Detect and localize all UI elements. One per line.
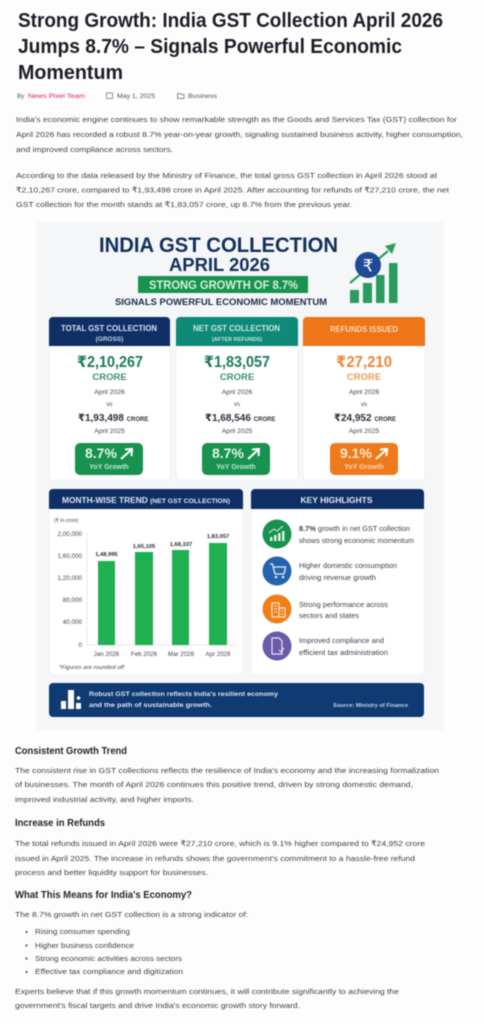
paragraph: growth trend [15,766,439,804]
panel: key highlights [251,489,424,675]
panel: key highlights: KEY HIGHLIGHTS [300,495,373,505]
paragraph: refunds: issued in April 2025. The increase in refunds shows the government's commitment to a hassle-free refund [15,854,415,863]
panel: net GST collection: ₹1,68,546 CRORE [205,413,275,424]
panel: total GST collection: ₹2,10,267 [77,354,143,371]
highlight: consumption: driving revenue growth [299,575,376,582]
panel: total GST collection: TOTAL GST COLLECTION [61,324,157,333]
article meta row: May 1, 2025 [117,93,156,100]
panel: net GST collection [176,317,298,480]
panel: total GST collection: vs [106,402,112,408]
footer banner: Robust GST collection reflects India's resilient economy [89,691,278,698]
icon: rupee growth chart: ₹ [363,256,373,276]
panel: total GST collection: ₹1,93,498 CRORE [78,413,148,424]
paragraph: refunds: process and better liquidity support for businesses. [15,868,208,877]
infographic heading: STRONG GROWTH OF 8.7% [149,278,298,292]
highlight: compliance: efficient tax administration [299,650,388,657]
intro paragraph 1: India's economic engine continues to show remarkable strength as the Goods and Services Tax (GST) collection for [16,115,457,124]
bar chart: 1,83,057 [207,534,229,540]
icon: rupee growth chart [350,243,398,303]
heading: increase in refunds: Increase in Refunds [15,818,105,829]
bullet list: Strong economic activities across sectors [35,954,182,963]
infographic heading: SIGNALS POWERFUL ECONOMIC MOMENTUM [115,297,327,307]
bar chart: 1,48,995 [95,552,119,558]
panel: refunds issued: YoY Growth [344,464,384,471]
panel: total GST collection: (GROSS) [96,336,123,343]
article meta row [17,93,217,100]
bar chart: 80,000 [63,597,82,604]
bullet list: Higher business confidence [35,941,134,950]
panel: net GST collection: April 2026 [222,389,253,396]
bar chart: (₹ in crore) [54,518,79,524]
highlight: sectors: Strong performance across [299,602,389,609]
highlight: sectors: sectors and states [299,613,360,620]
closing paragraph: government's fiscal targets and drive India's economic growth story forward. [15,1001,300,1010]
panel: total GST collection [49,317,170,480]
bar chart: Jan 2026 [94,651,120,658]
highlight: growth [262,520,414,548]
title: Strong Growth: India GST Collection April 2026 [18,9,443,32]
intro paragraph 1 [16,115,463,154]
footer banner [49,683,424,717]
panel: refunds issued: ₹24,952 CRORE [334,413,396,424]
panel: net GST collection: NET GST COLLECTION [193,324,280,333]
bullet list [26,927,183,976]
panel: total GST collection: 8.7% [85,445,117,461]
bar chart: 40,000 [63,619,82,626]
highlight: growth: shows strong economic momentum [299,538,414,545]
intro paragraph 2: ₹2,10,267 crore, compared to ₹1,93,498 crore in April 2025. After accounting for refunds of ₹27,210 crore, the net [16,186,450,194]
panel: net GST collection: April 2025 [222,428,253,435]
intro paragraph 1: and improved compliance across sectors. [16,145,173,154]
intro paragraph 2: According to the data released by the Ministry of Finance, the total gross GST collection in April 2026 stood at [16,171,438,180]
bar chart: 1,68,337 [170,542,192,548]
bar chart: 0 [78,642,82,649]
panel: net GST collection: ₹1,83,057 [204,354,270,371]
heading: consistent growth trend: Consistent Growth Trend [15,746,127,757]
bar chart: Feb 2026 [131,651,158,658]
panel: net GST collection: (AFTER REFUNDS) [212,337,262,343]
title [18,9,443,84]
infographic [36,222,444,730]
panel: refunds issued: vs [361,402,367,408]
panel: refunds issued: CRORE [347,372,381,383]
panel: refunds issued: ₹27,210 [336,354,392,371]
footer banner: and the path of sustainable growth. [89,702,212,709]
highlight: consumption [262,556,397,586]
panel: month-wise trend: MONTH-WISE TREND (NET GST COLLECTION) [62,496,230,505]
panel: refunds issued: April 2026 [349,389,380,396]
panel: month-wise trend [49,489,243,675]
intro paragraph 2: GST collection for the month stands at ₹1,83,057 crore, up 8.7% from the previous year. [16,200,352,209]
panel: net GST collection: YoY Growth [216,464,256,471]
paragraph: refunds: The total refunds issued in April 2026 were ₹27,210 crore, which is 9.1% higher compared to ₹24,952 crore [15,839,425,848]
intro paragraph 2 [16,171,450,209]
infographic heading: APRIL 2026 [169,255,270,275]
panel: refunds issued: 9.1% [340,445,372,461]
panel: total GST collection: CRORE [92,372,127,383]
panel: net GST collection: 8.7% [212,445,244,461]
infographic heading: INDIA GST COLLECTION [99,234,338,257]
bar chart: 1,60,000 [57,553,82,560]
infographic heading [99,234,338,307]
panel: month-wise trend: *Figures are rounded off [59,665,125,671]
title: Momentum [18,61,123,84]
article meta row: News Pixel Team [28,93,85,100]
panel: refunds issued: April 2025 [349,428,380,435]
paragraph: growth trend: of businesses. The month of April 2026 continues this positive trend, driven by strong domestic demand, [15,780,413,789]
article meta row: Business [188,93,217,100]
bar chart: 2,00,000 [57,531,82,538]
bar chart: 1,65,105 [133,544,156,550]
bar chart: 1,20,000 [57,575,82,582]
panel: net GST collection: vs [234,402,240,408]
icon: bars [61,690,81,709]
heading: what this means: What This Means for India's Economy? [15,890,192,901]
bullet list: Effective tax compliance and digitization [35,967,183,976]
panel: refunds issued: REFUNDS ISSUED [330,325,398,334]
footer banner: Source: Ministry of Finance [333,703,408,709]
closing paragraph [15,987,399,1010]
bar chart: Apr 2026 [205,651,231,658]
highlight: compliance: Improved compliance and [299,638,384,645]
bullet list: Rising consumer spending [35,927,130,936]
panel: total GST collection: YoY Growth [89,464,129,471]
highlight: sectors [262,594,389,624]
highlight: consumption: Higher domestic consumption [299,563,397,570]
highlight: growth: 8.7% growth in net GST collection [299,526,410,533]
panel: net GST collection: CRORE [220,372,254,383]
title: Jumps 8.7% – Signals Powerful Economic [18,35,402,58]
panel: refunds issued [303,317,425,480]
highlight: compliance [262,632,388,660]
bar chart: Mar 2026 [168,651,195,658]
lead-in sentence: The 8.7% growth in net GST collection is a strong indicator of: [15,910,248,919]
paragraph: refunds [15,839,425,877]
intro paragraph 1: April 2026 has recorded a robust 8.7% year-on-year growth, signaling sustained business activity, higher consumption, [16,130,463,139]
bar chart [54,518,238,658]
paragraph: growth trend: The consistent rise in GST collections reflects the resilience of India's economy and the increasing formalization [15,766,439,775]
article meta row: By [17,93,25,100]
panel: total GST collection: April 2026 [94,389,125,396]
closing paragraph: Experts believe that if this growth momentum continues, it will contribute significantly to achieving the [15,987,399,996]
panel: total GST collection: April 2025 [94,428,125,435]
paragraph: growth trend: improved industrial activity, and higher imports. [15,795,194,804]
